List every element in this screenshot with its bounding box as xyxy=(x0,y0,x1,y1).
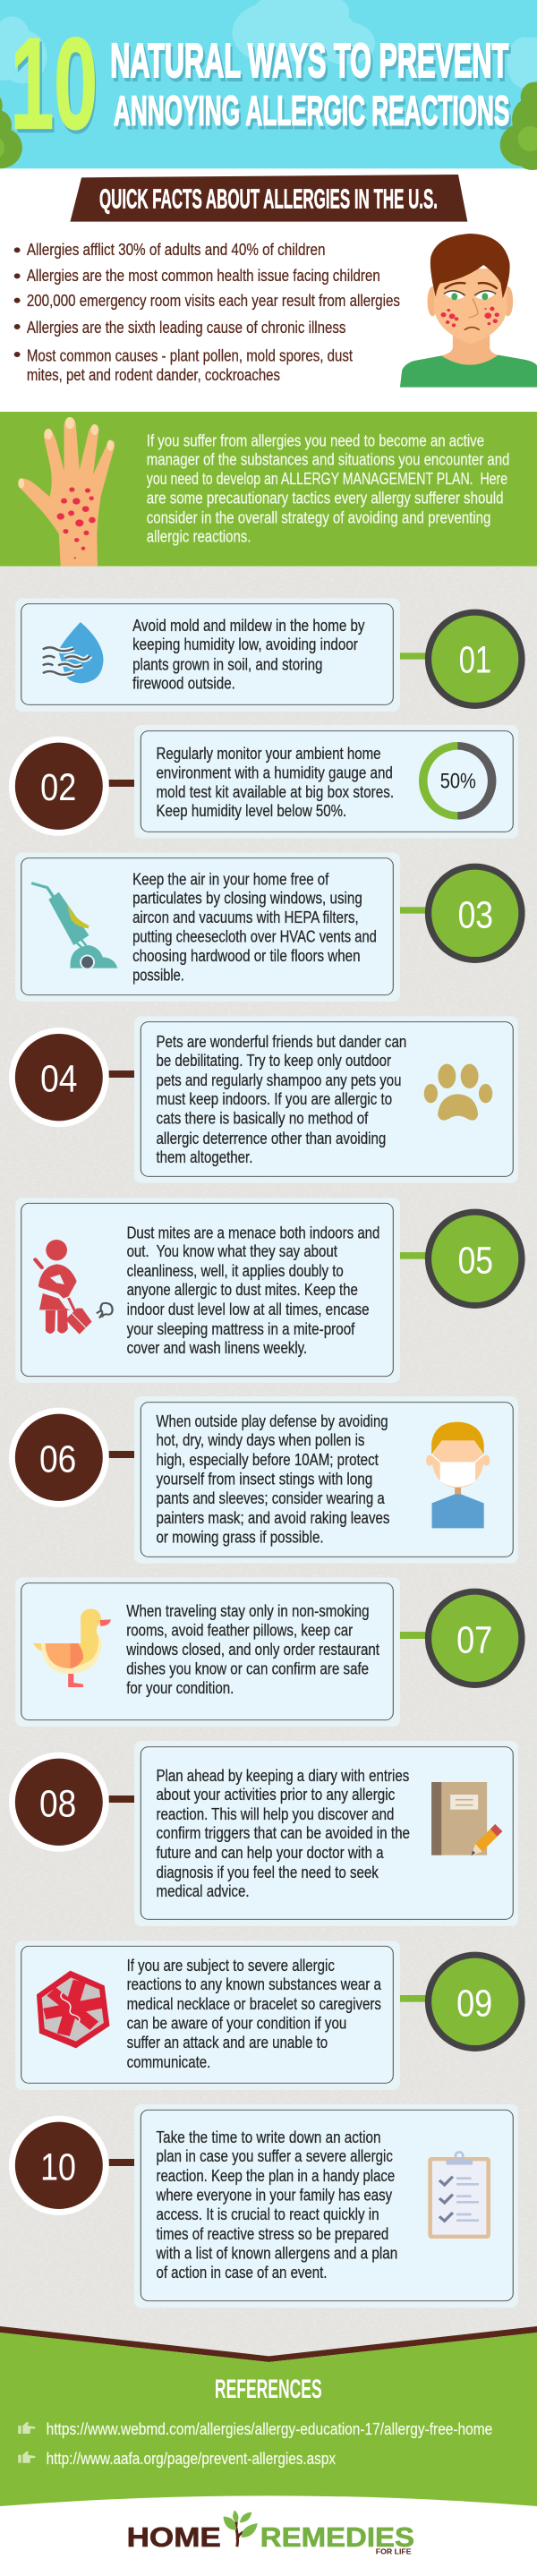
number badge 10 xyxy=(9,2116,109,2215)
text: of action in case of an event. xyxy=(156,2264,327,2282)
section: quick facts xyxy=(14,175,537,388)
text: Dust mites are a menace both indoors and xyxy=(127,1224,379,1242)
text: environment with a humidity gauge and xyxy=(156,764,393,782)
panel: tip 02 xyxy=(9,725,518,839)
logo: FOR LIFE xyxy=(376,2547,412,2556)
number badge 08: 08 xyxy=(39,1781,76,1825)
text: Plan ahead by keeping a diary with entries xyxy=(156,1767,409,1786)
text: hot, dry, windy days when pollen is xyxy=(156,1431,365,1450)
logo: REMEDIES xyxy=(260,2521,414,2552)
icon: notebook and pencil xyxy=(431,1782,502,1855)
text: suffer an attack and are unable to xyxy=(127,2034,328,2052)
text: must keep indoors. If you are allergic to xyxy=(156,1090,392,1109)
panel: tip 09 xyxy=(15,1941,525,2090)
panel: tip 05 xyxy=(15,1198,525,1383)
text: indoor dust level low at all times, encase xyxy=(127,1301,370,1319)
connector xyxy=(400,1995,427,2002)
number badge 08 xyxy=(9,1753,109,1852)
text: dishes you know or can confirm are safe xyxy=(126,1660,369,1678)
text: cover and wash linens weekly. xyxy=(127,1339,307,1358)
text: painters mask; and avoid raking leaves xyxy=(156,1509,390,1528)
fact list: Most common causes - plant pollen, mold spores, dust xyxy=(27,347,354,365)
text: allergic deterrence other than avoiding xyxy=(156,1130,386,1148)
text: When traveling stay only in non-smoking xyxy=(126,1602,369,1621)
text: times of reactive stress so be prepared xyxy=(156,2225,388,2244)
text xyxy=(132,871,377,985)
text: plants grown in soil, and storing xyxy=(132,656,322,674)
number badge 04: 04 xyxy=(40,1056,77,1100)
text: Avoid mold and mildew in the home by xyxy=(132,617,365,635)
text: possible. xyxy=(132,967,184,985)
text: reaction. This will help you discover and xyxy=(156,1805,394,1824)
connector xyxy=(400,1632,427,1639)
panel: references xyxy=(0,2333,537,2506)
text: choosing hardwood or tile floors when xyxy=(132,947,361,966)
text xyxy=(156,1412,390,1547)
background: paper xyxy=(0,567,537,2366)
panel: tip 03 xyxy=(15,853,525,1002)
connector xyxy=(400,653,427,660)
connector xyxy=(400,1252,427,1259)
text: where everyone in your family has easy xyxy=(156,2187,392,2205)
connector xyxy=(109,1796,134,1803)
big number 10: 10 xyxy=(13,14,98,160)
text: Regularly monitor your ambient home xyxy=(156,745,381,763)
text: access. It is crucial to react quickly in xyxy=(156,2205,379,2224)
fact list: mites, pet and rodent dander, cockroaches xyxy=(27,366,280,385)
text: confirm triggers that can be avoided in the xyxy=(156,1824,410,1843)
fact list: Allergies are the most common health issue facing children xyxy=(27,267,380,286)
text: reaction. Keep the plan in a handy place xyxy=(156,2167,395,2186)
text: firewood outside. xyxy=(132,675,235,693)
number badge 06: 06 xyxy=(39,1437,76,1480)
heading: references: REFERENCES xyxy=(215,2374,322,2404)
text: high, especially before 10AM; protect xyxy=(156,1451,379,1470)
icon: water drop and waves xyxy=(43,622,104,683)
panel: tip 04 xyxy=(9,1016,518,1183)
number badge 01: 01 xyxy=(459,638,491,681)
number badge 05 xyxy=(425,1209,525,1309)
number badge 02: 02 xyxy=(40,765,76,808)
icon: tree xyxy=(223,2510,258,2546)
reference link 2: http://www.aafa.org/page/prevent-allergies.aspx xyxy=(47,2450,336,2469)
fact list: Allergies afflict 30% of adults and 40% of children xyxy=(27,241,326,260)
number badge 07: 07 xyxy=(456,1618,492,1661)
text: When outside play defense by avoiding xyxy=(156,1412,388,1431)
icon: clipboard checklist xyxy=(428,2152,490,2239)
connector xyxy=(109,1070,134,1078)
big number 10 xyxy=(10,11,98,160)
number badge 06 xyxy=(9,1408,109,1507)
number badge 09 xyxy=(425,1952,525,2051)
icon: person with mask xyxy=(426,1422,490,1528)
text xyxy=(156,1033,406,1167)
text: or mowing grass if possible. xyxy=(156,1529,324,1547)
panel: intro band xyxy=(0,412,537,567)
text xyxy=(132,617,365,693)
icon: person sweeping dust xyxy=(35,1240,113,1335)
text: medical necklace or bracelet so caregivers xyxy=(127,1995,381,2014)
text: can be aware of your condition if you xyxy=(127,2015,346,2033)
icon: pointing hand xyxy=(18,2422,35,2434)
text: anyone allergic to dust mites. Keep the xyxy=(127,1281,358,1300)
trees xyxy=(0,82,537,170)
text: particulates by closing windows, using xyxy=(132,890,362,908)
connector xyxy=(400,907,427,914)
number badge 07 xyxy=(425,1589,525,1688)
connector xyxy=(109,2159,134,2166)
number badge 04 xyxy=(9,1028,109,1127)
panel: tip 10 xyxy=(9,2104,518,2307)
text: with a list of known allergens and a plan xyxy=(156,2245,397,2263)
text: mold test kit available at big box stores. xyxy=(156,783,394,802)
icon: duck xyxy=(33,1608,111,1687)
text: rooms, avoid feather pillows, keep car xyxy=(126,1622,353,1640)
text: aircon and vacuums with HEPA filters, xyxy=(132,908,359,927)
text xyxy=(156,2128,397,2282)
fact list xyxy=(14,241,400,385)
number badge 03 xyxy=(425,864,525,963)
text: reactions to any known substances wear a xyxy=(127,1975,381,1994)
big number 10: 10 xyxy=(10,11,98,157)
text: windows closed, and only order restaurant xyxy=(125,1641,379,1659)
chart: 50% donut xyxy=(419,742,496,820)
intro text xyxy=(147,432,509,546)
text xyxy=(127,1957,381,2072)
text: pants and sleeves; consider wearing a xyxy=(156,1489,385,1508)
text: be debilitating. Try to keep only outdoor xyxy=(156,1052,391,1070)
text: cleanliness, well, it applies doubly to xyxy=(127,1262,344,1281)
panel: tip 01 xyxy=(15,598,525,712)
icon: pointing hand xyxy=(18,2452,35,2463)
text: If you are subject to severe allergic xyxy=(127,1957,335,1975)
number badge 02 xyxy=(9,737,109,836)
panel: tip 07 xyxy=(15,1577,525,1727)
logo: HOME xyxy=(127,2521,221,2552)
fact list: Allergies are the sixth leading cause of chronic illness xyxy=(27,319,346,337)
panel: tip 08 xyxy=(9,1741,518,1926)
text: diagnosis if you feel the need to seek xyxy=(156,1864,379,1882)
icon: paw xyxy=(424,1064,492,1121)
text xyxy=(127,1224,379,1358)
icon: face with rash xyxy=(400,234,537,388)
heading banner xyxy=(70,175,467,222)
text: communicate. xyxy=(127,2053,210,2072)
header: sky banner xyxy=(0,0,537,170)
text: medical advice. xyxy=(156,1882,250,1901)
text: your sleeping mattress in a mite-proof xyxy=(127,1320,355,1339)
number badge 05: 05 xyxy=(458,1239,493,1282)
text: pets and regularly shampoo any pets you xyxy=(156,1071,401,1090)
text: them altogether. xyxy=(156,1148,252,1167)
icon: vacuum xyxy=(31,883,117,969)
text: for your condition. xyxy=(126,1679,234,1698)
number badge 03: 03 xyxy=(458,893,493,936)
text: plan in case you suffer a severe allergic xyxy=(156,2147,393,2166)
text: cats there is basically no method of xyxy=(156,1110,369,1128)
text: keeping humidity low, avoiding indoor xyxy=(132,635,358,654)
text: out. You know what they say about xyxy=(127,1242,337,1261)
clouds xyxy=(0,0,537,88)
fact list: 200,000 emergency room visits each year result from allergies xyxy=(27,292,400,311)
text: Pets are wonderful friends but dander can xyxy=(156,1033,406,1052)
text: about your activities prior to any allergic xyxy=(156,1786,395,1804)
text: Take the time to write down an action xyxy=(156,2128,381,2147)
text: Keep the air in your home free of xyxy=(132,871,329,889)
text: future and can help your doctor with a xyxy=(156,1844,384,1863)
number badge 10: 10 xyxy=(40,2145,76,2188)
text: putting cheesecloth over HVAC vents and xyxy=(132,928,377,946)
chart: 50% donut: 50% xyxy=(440,770,476,793)
connector xyxy=(109,780,134,787)
chevron divider xyxy=(0,2326,537,2362)
number badge 09: 09 xyxy=(456,1982,492,2025)
text: yourself from insect stings with long xyxy=(156,1471,372,1488)
number badge 01 xyxy=(425,610,525,709)
intro text: allergic reactions. xyxy=(147,528,251,546)
text xyxy=(125,1602,379,1698)
text: Keep humidity level below 50%. xyxy=(156,802,346,821)
text xyxy=(156,1767,410,1901)
logo xyxy=(127,2510,414,2556)
connector xyxy=(109,1451,134,1458)
icon: medical alert badge xyxy=(37,1971,109,2048)
panel: tip 06 xyxy=(9,1396,518,1564)
text xyxy=(156,745,394,821)
section: footer xyxy=(0,2326,537,2556)
icon: hand with rash xyxy=(18,417,115,567)
